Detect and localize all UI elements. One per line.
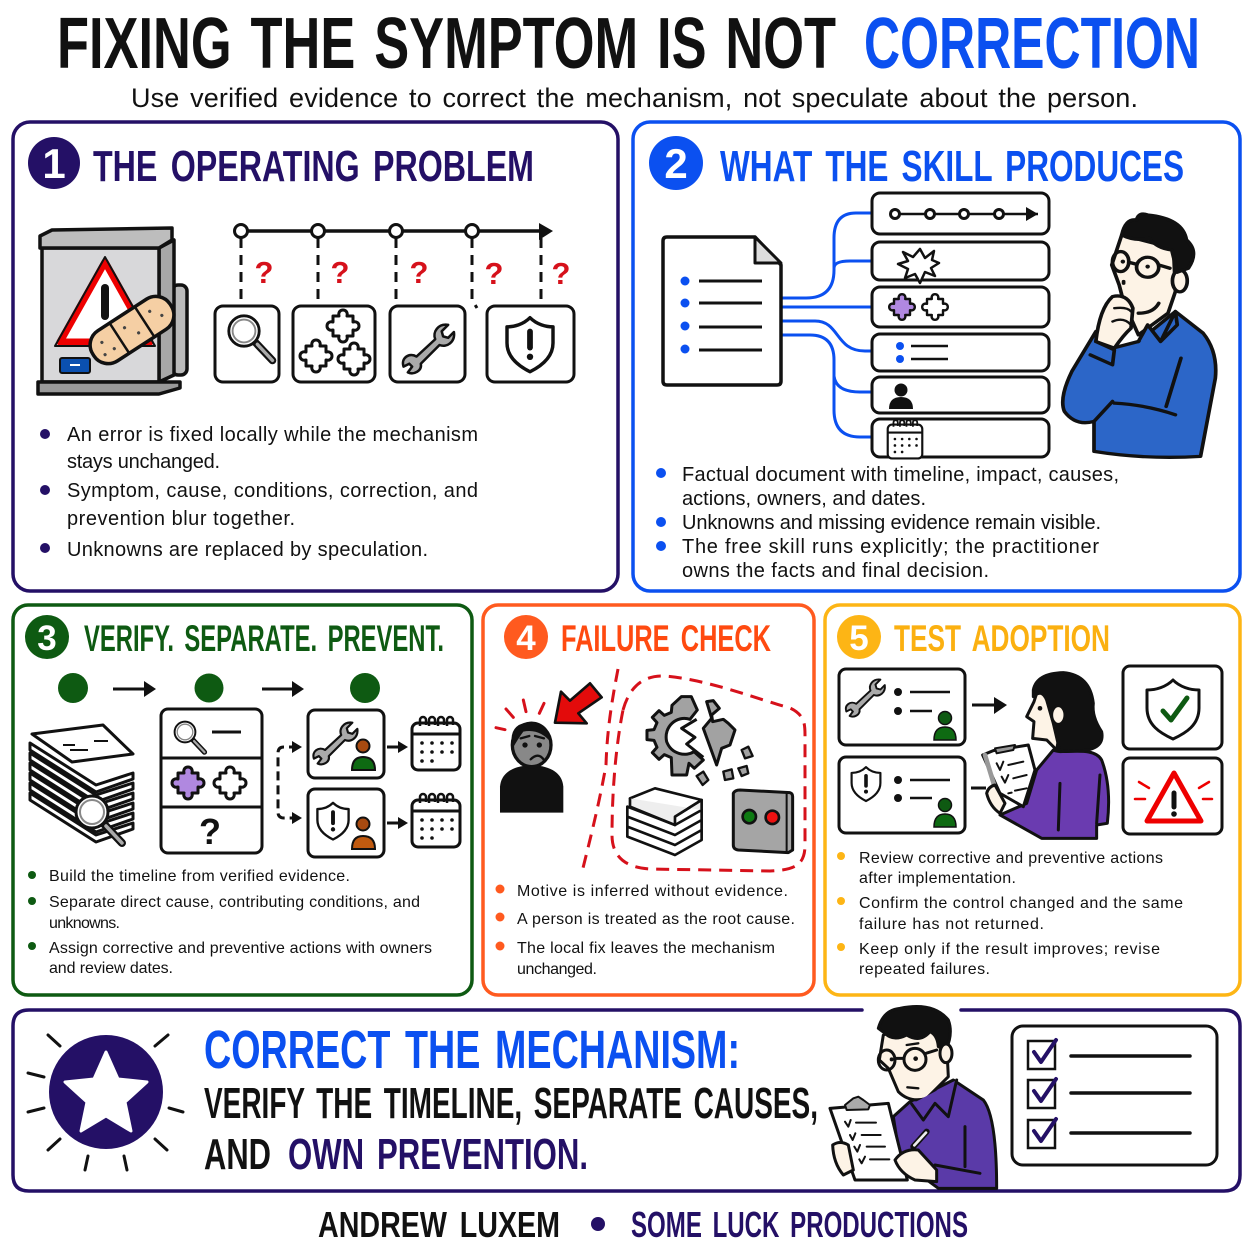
number badge 1: 1 [42, 140, 66, 187]
icon: star badge [28, 1035, 183, 1170]
process dots and arrows [58, 673, 380, 703]
footer credit: SOME LUCK PRODUCTIONS [631, 1204, 968, 1245]
icon: document [663, 237, 781, 385]
panel: test adoption [825, 605, 1240, 995]
table: verified, cause, unknown: ? [199, 811, 221, 852]
conclusion line 2: OWN PREVENTION. [288, 1130, 588, 1179]
heading: FAILURE CHECK [561, 618, 771, 659]
corrective action card [308, 710, 384, 778]
bullet list [28, 868, 432, 977]
panel: failure check [483, 605, 814, 995]
icon: blamed person with red arrow [496, 683, 602, 813]
card: preventive action [839, 757, 965, 833]
timeline with question marks: ? [255, 255, 273, 290]
footer credit: ANDREW LUXEM [318, 1204, 560, 1245]
bullet list [496, 883, 795, 978]
illustration: reviewer with clipboard [983, 673, 1109, 838]
number badge 5: 5 [849, 619, 869, 658]
bullet list: Keep only if the result improves; revise [859, 941, 1160, 958]
timeline with question marks: ? [485, 256, 503, 291]
panel: verify separate prevent [13, 605, 472, 995]
bullet list: after implementation. [859, 870, 1016, 887]
number badge 3: 3 [37, 619, 57, 658]
icon: shield with check [1123, 666, 1222, 749]
arrows to reviewer [971, 697, 1007, 788]
panel: conclusion banner [13, 1007, 1240, 1191]
subtitle: Use verified evidence to correct the mechanism, not speculate about the person. [131, 83, 1138, 113]
bullet list: Motive is inferred without evidence. [517, 883, 788, 900]
bullet list: unchanged. [517, 961, 597, 978]
heading: VERIFY. SEPARATE. PREVENT. [84, 618, 444, 659]
number badge 2 [649, 136, 703, 190]
icon boxes: magnifier, puzzle, wrench, shield [215, 306, 574, 382]
icon: control box [733, 790, 793, 853]
bullet list: owns the facts and final decision. [682, 560, 989, 582]
number badge 3 [25, 615, 69, 659]
timeline with question marks: ? [331, 255, 349, 290]
icon: broken gear [647, 697, 753, 785]
icon: papers stack [627, 788, 702, 855]
number badge 1 [28, 137, 80, 189]
illustration: thinking man [1063, 214, 1216, 457]
bullet list: The free skill runs explicitly; the practitioner [682, 536, 1099, 558]
bullet list: Unknowns and missing evidence remain visible. [682, 512, 1101, 534]
bullet list [656, 464, 1119, 582]
preventive action card [308, 789, 384, 857]
conclusion line 2: AND [204, 1130, 271, 1179]
bullet list: Build the timeline from verified evidence. [49, 868, 350, 885]
dashed divider [583, 669, 618, 868]
output rows with icons [872, 193, 1049, 458]
bullet list: The local fix leaves the mechanism [517, 940, 775, 957]
icon: warning triangle [1123, 758, 1222, 834]
bullet list: and review dates. [49, 960, 173, 977]
number badge 4: 4 [516, 619, 536, 658]
panel: what the skill produces [633, 122, 1240, 591]
bullet list: Confirm the control changed and the same [859, 895, 1183, 912]
bullet list: A person is treated as the root cause. [517, 911, 795, 928]
number badge 2: 2 [664, 140, 688, 187]
icon: machine with warning and bandage [38, 228, 187, 394]
bullet list: Factual document with timeline, impact, causes, [682, 464, 1119, 486]
panel: the operating problem [13, 122, 618, 591]
footer credit [318, 1204, 968, 1245]
connectors from document to rows [781, 213, 872, 437]
review calendars [387, 717, 460, 847]
bullet list [40, 424, 478, 561]
bullet list: unknowns. [49, 915, 120, 932]
heading: TEST ADOPTION [894, 618, 1110, 659]
number badge 5 [837, 615, 881, 659]
branching dashed arrows [278, 741, 302, 824]
timeline with question marks: ? [552, 256, 570, 291]
bullet list [837, 850, 1183, 978]
bullet list: An error is fixed locally while the mechanism [67, 424, 478, 446]
illustration: man with clipboard [830, 1007, 997, 1188]
bullet list: Separate direct cause, contributing conditions, and [49, 894, 420, 911]
icon: evidence stack with magnifier [30, 725, 133, 843]
bullet list: Assign corrective and preventive actions with owners [49, 940, 432, 957]
bullet list: Review corrective and preventive actions [859, 850, 1163, 867]
checklist card [1012, 1026, 1217, 1165]
conclusion heading: CORRECT THE MECHANISM: [204, 1020, 740, 1080]
conclusion line 2 [204, 1130, 588, 1179]
title: FIXING THE SYMPTOM IS NOT [57, 4, 836, 84]
bullet list: repeated failures. [859, 961, 990, 978]
bullet list: prevention blur together. [67, 508, 295, 530]
card: corrective action [839, 669, 965, 745]
timeline with question marks: ? [410, 255, 428, 290]
number badge 4 [504, 615, 548, 659]
bullet list: failure has not returned. [859, 916, 1044, 933]
heading: THE OPERATING PROBLEM [93, 142, 534, 191]
table: verified, cause, unknown [161, 709, 262, 853]
bullet list: actions, owners, and dates. [682, 488, 926, 510]
timeline with question marks [234, 223, 570, 308]
conclusion line 1: VERIFY THE TIMELINE, SEPARATE CAUSES, [204, 1079, 818, 1128]
dashed mechanism boundary [612, 676, 805, 871]
bullet list: stays unchanged. [67, 451, 220, 473]
bullet list: Unknowns are replaced by speculation. [67, 539, 428, 561]
bullet list: Symptom, cause, conditions, correction, and [67, 480, 478, 502]
